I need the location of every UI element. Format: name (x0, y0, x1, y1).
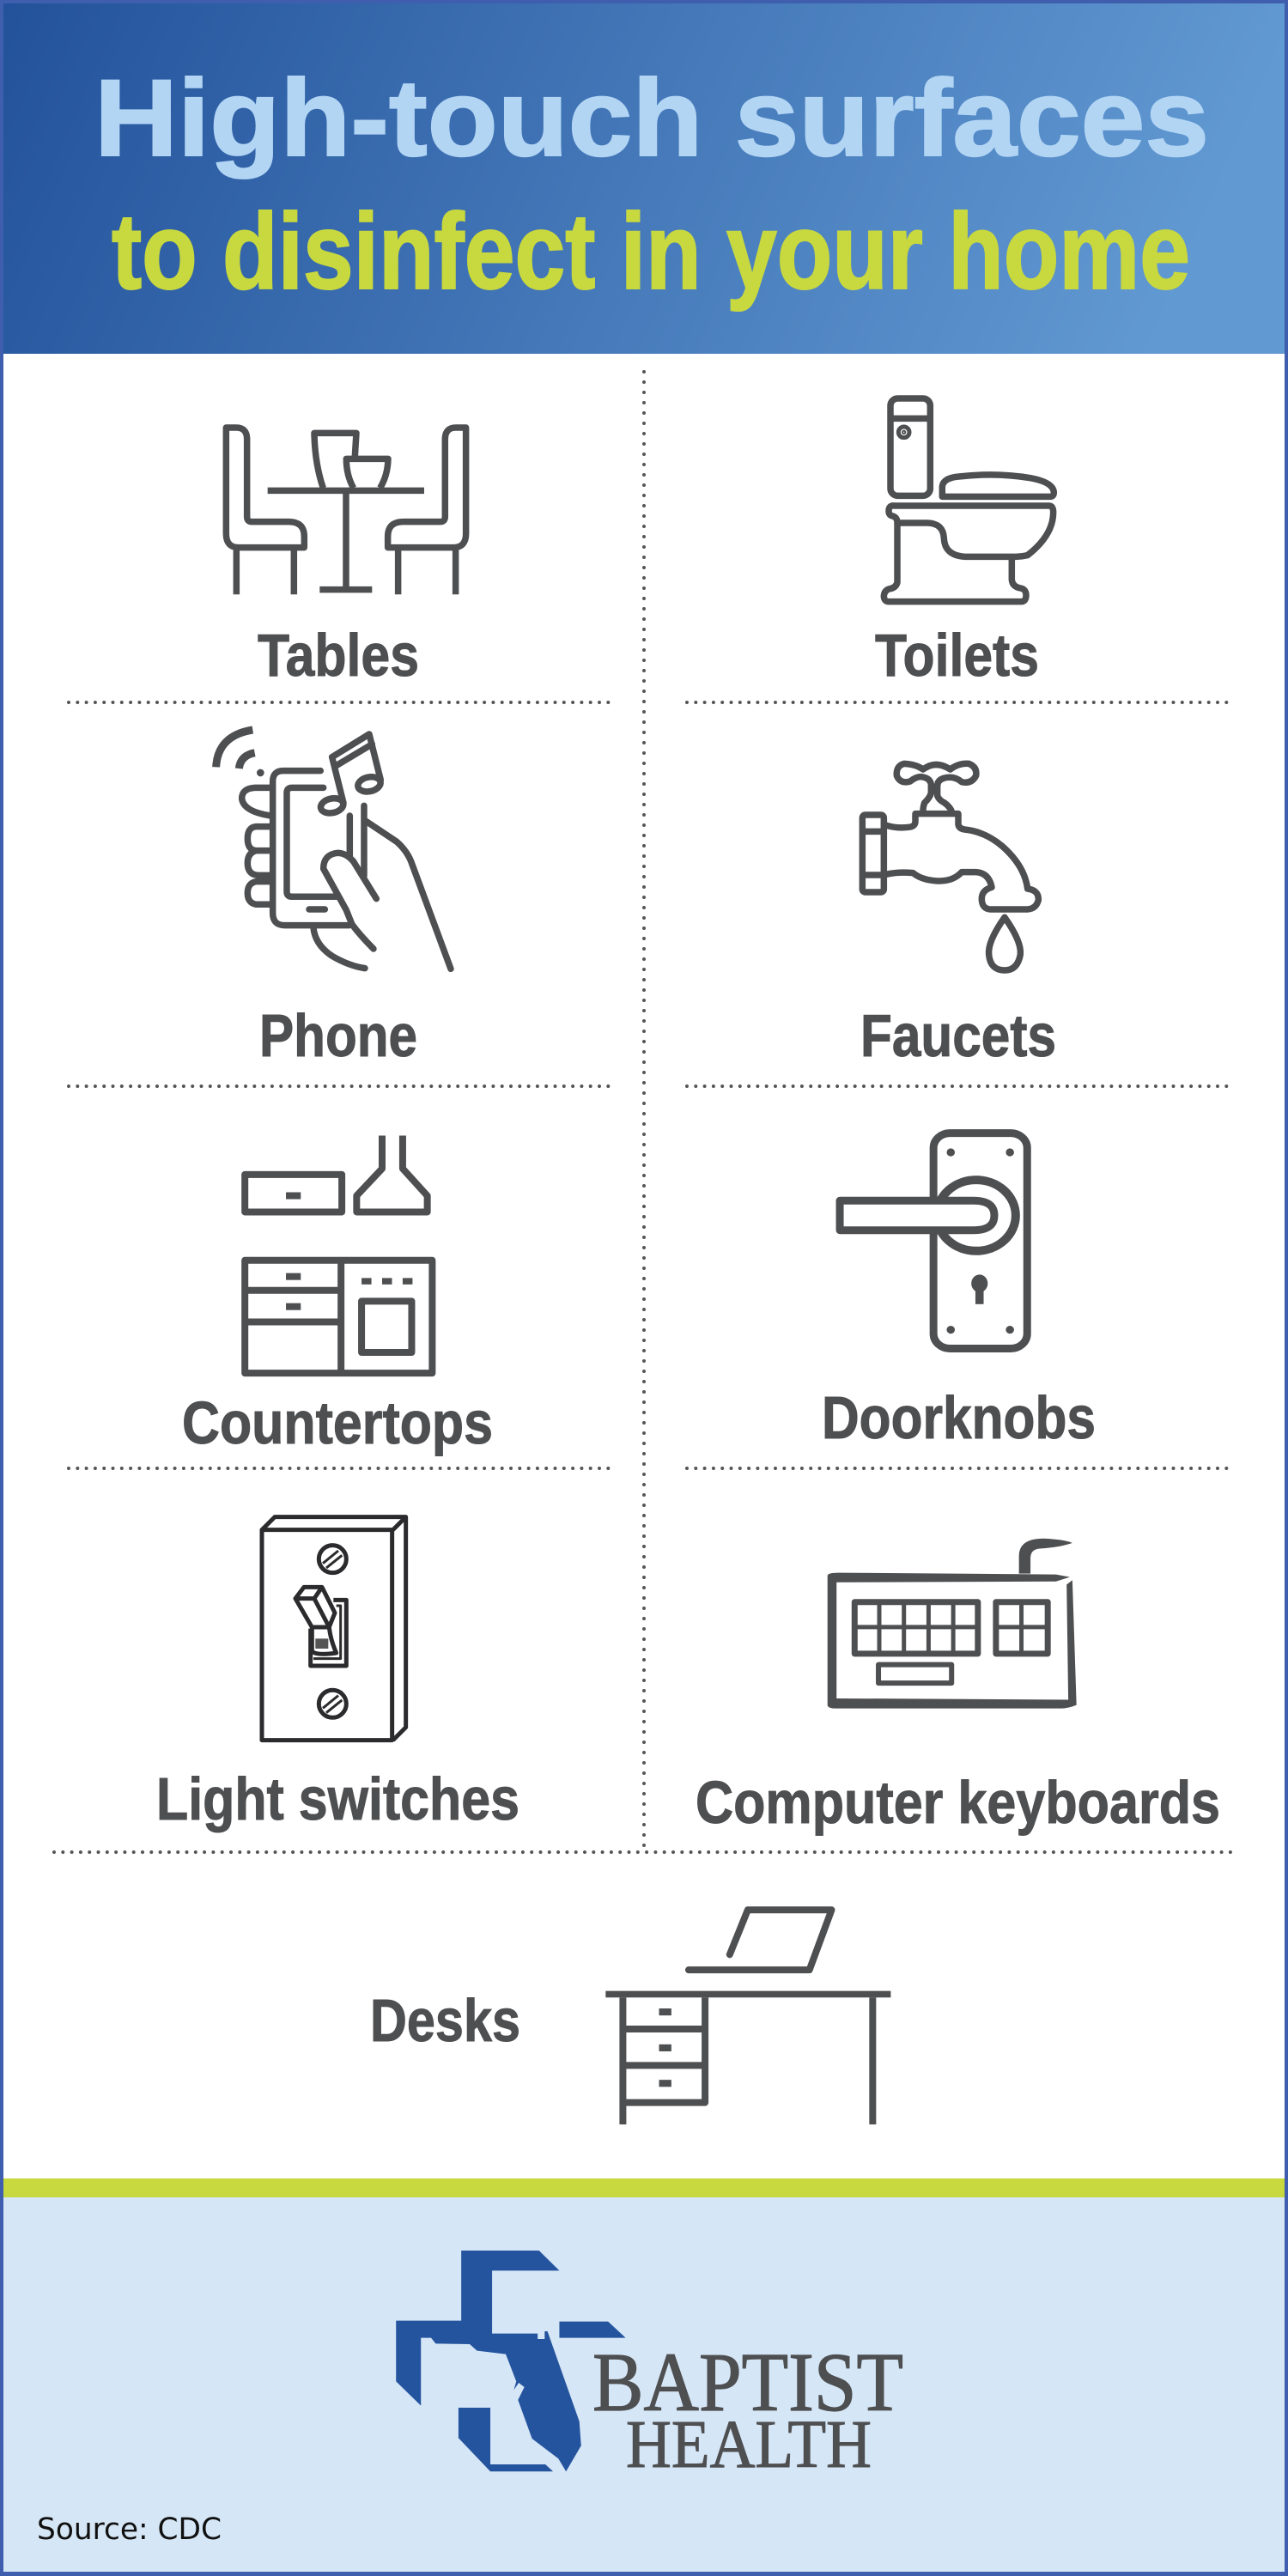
header banner (3, 3, 1285, 354)
panel: computer keyboards (696, 1539, 1220, 1836)
source note: Source: CDC (37, 2512, 222, 2547)
logo mark: Florida cross (396, 2251, 626, 2471)
icon: light switch (262, 1517, 406, 1741)
icon: hand holding phone (216, 730, 451, 969)
panel: faucets (860, 763, 1056, 1069)
label: Tables: Tables (258, 622, 419, 689)
label: Doorknobs: Doorknobs (822, 1384, 1096, 1451)
panel: tables (226, 428, 466, 689)
footer accent bar (3, 2178, 1285, 2197)
icon: toilet (884, 398, 1054, 602)
panel: light switches (156, 1517, 519, 1832)
title: High-touch surfaces (94, 57, 1209, 179)
panel: doorknobs (822, 1133, 1096, 1451)
icon: desk with laptop (605, 1910, 890, 2124)
footer panel (3, 2197, 1285, 2572)
logo: Baptist Health (396, 2251, 903, 2482)
panel: desks (370, 1910, 890, 2124)
icon: kitchen counters (245, 1135, 432, 1373)
label: Phone: Phone (259, 1002, 417, 1069)
icon: dining table and chairs (226, 428, 466, 594)
label: Countertops: Countertops (182, 1389, 493, 1456)
label: Light switches: Light switches (156, 1765, 519, 1832)
label: Desks: Desks (370, 1987, 520, 2054)
label: Toilets: Toilets (875, 622, 1039, 689)
icon: dripping faucet (862, 763, 1038, 970)
panel: phone (216, 730, 451, 1069)
icon: door handle (840, 1133, 1027, 1348)
logo word: Health: HEALTH (626, 2408, 872, 2482)
panel: countertops (182, 1135, 493, 1456)
label: Faucets: Faucets (860, 1002, 1056, 1069)
icon: keyboard (828, 1539, 1077, 1709)
logo word: Baptist: BAPTIST (592, 2336, 903, 2428)
panel: toilets (875, 398, 1054, 689)
label: Computer keyboards: Computer keyboards (696, 1769, 1220, 1836)
